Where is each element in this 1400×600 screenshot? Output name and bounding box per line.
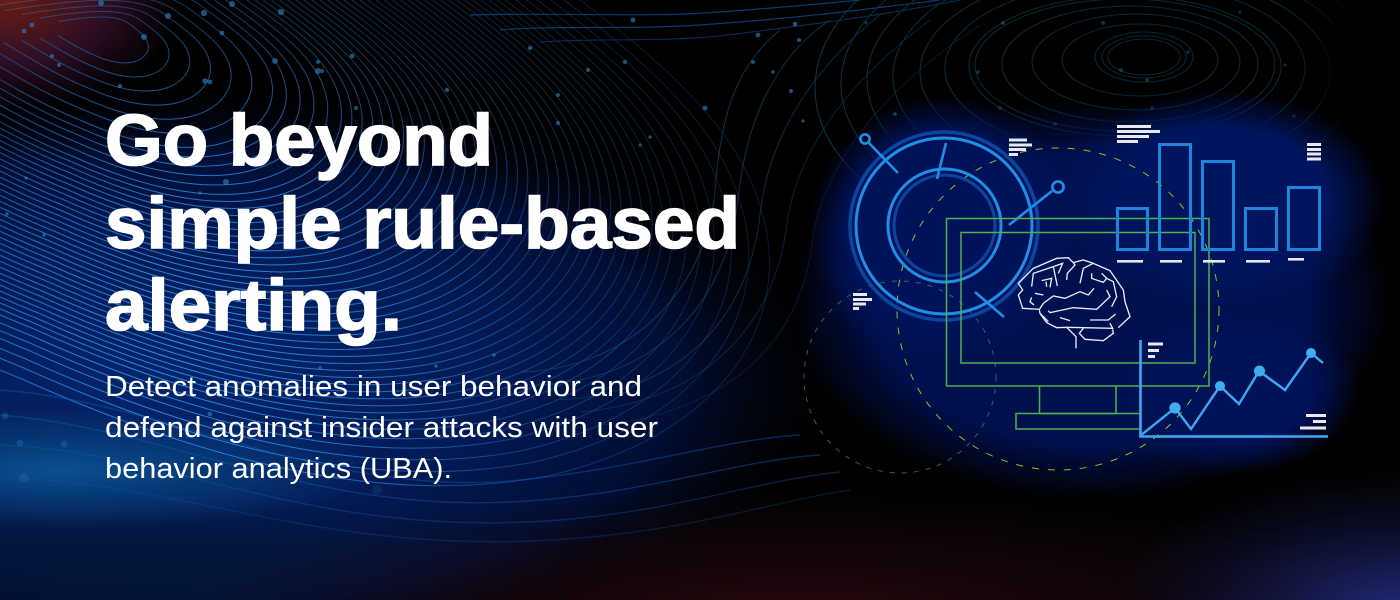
icon: radar legend bars xyxy=(1009,138,1032,156)
illustration: monitor outline xyxy=(946,218,1209,429)
bar chart labels xyxy=(1117,125,1321,263)
icon: left legend bars xyxy=(853,293,872,310)
subheading text xyxy=(105,371,658,485)
subheading text: behavior analytics (UBA). xyxy=(105,453,452,485)
icon: radar target rings xyxy=(850,132,1064,320)
background: right edge fade xyxy=(1290,0,1350,600)
subheading text: Detect anomalies in user behavior and xyxy=(105,371,642,403)
background: concentric swirl, top right xyxy=(815,0,1400,262)
illustration: dashed guide circles xyxy=(804,148,1219,473)
background: soft lower streams xyxy=(0,390,850,542)
line chart xyxy=(1140,340,1328,436)
background: teal contour lines, centre xyxy=(520,15,980,425)
background: bottom colour washes xyxy=(180,470,1400,600)
background: flowing streamlines swirl, left xyxy=(0,0,769,486)
background: top streams xyxy=(470,0,960,42)
headline: Go beyond xyxy=(105,101,493,181)
headline: simple rule-based xyxy=(105,184,740,264)
bar chart xyxy=(1118,144,1320,250)
subheading text: defend against insider attacks with user xyxy=(105,412,658,444)
background: blue glow behind illustration xyxy=(790,90,1390,500)
icon: brain xyxy=(1018,258,1130,348)
background: scattered particles xyxy=(2,0,1296,495)
headline: alerting. xyxy=(105,266,402,346)
headline xyxy=(105,101,740,346)
